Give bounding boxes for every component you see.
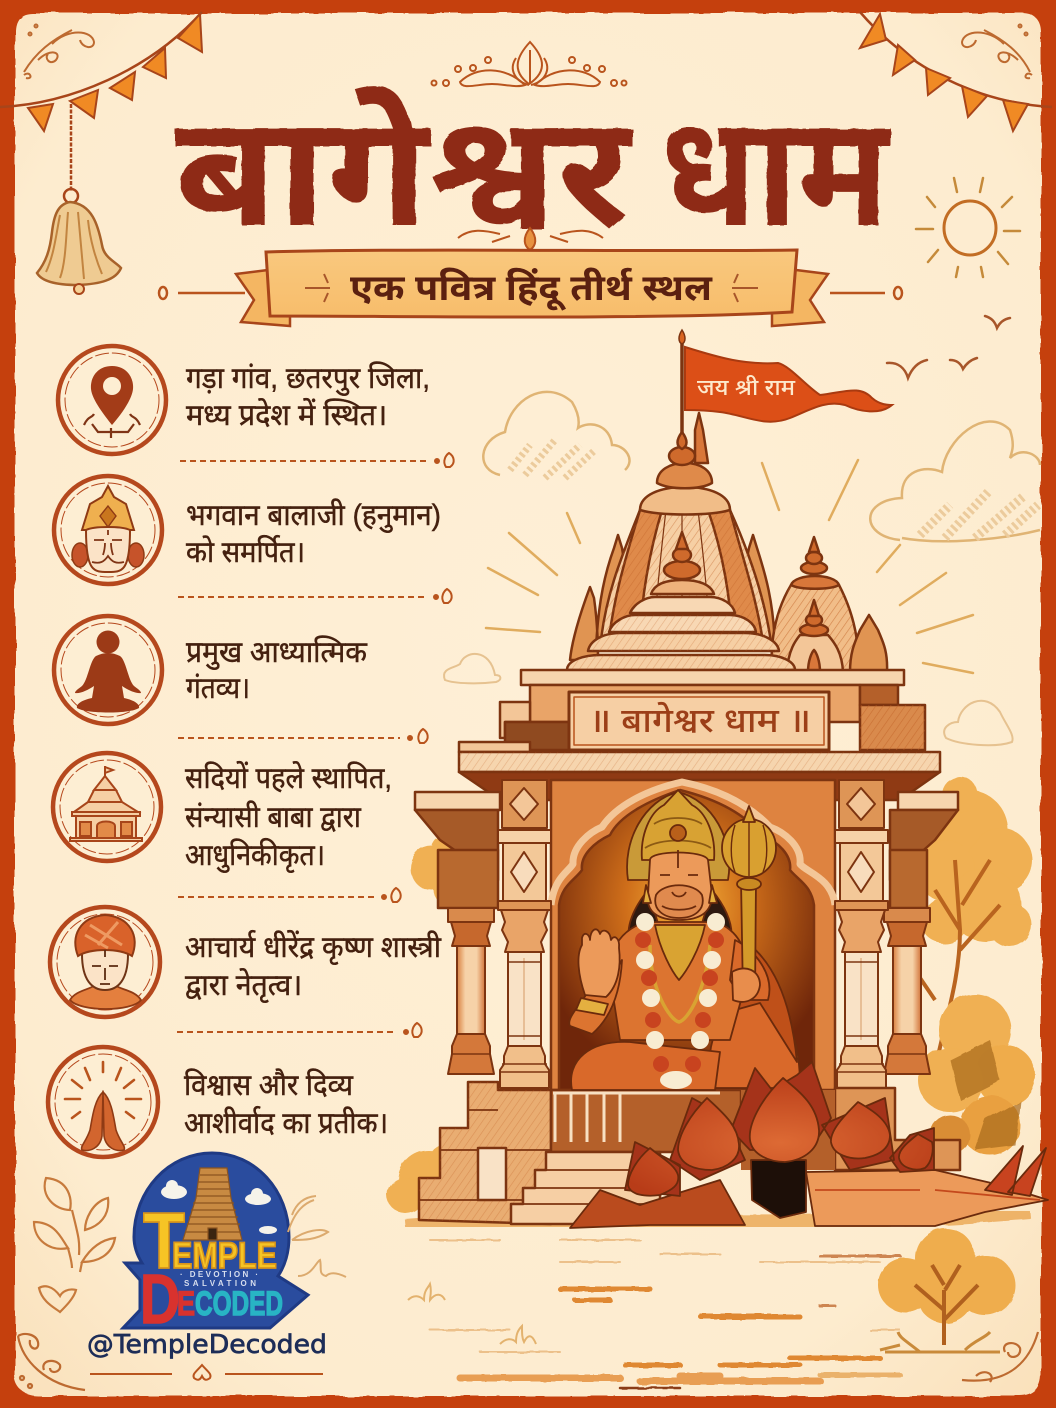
right side ornament: [830, 287, 902, 299]
icon: sun: [916, 178, 1020, 277]
corner scroll bottom left: [18, 1334, 85, 1390]
tree upper right: [915, 777, 1032, 1070]
item 1 text: मध्य प्रदेश में स्थित।: [186, 397, 387, 432]
face: [648, 852, 712, 920]
title: बागेश्वर: [175, 85, 633, 258]
ribbon ornaments: [305, 274, 758, 302]
ribbon left tail: [236, 270, 290, 326]
main dome bands: [640, 487, 730, 514]
left side ornament: [159, 287, 245, 299]
item 4 text: [185, 760, 392, 874]
leaves lower left: [34, 1178, 115, 1312]
bunting left: [0, 12, 202, 131]
title underline ornament: [458, 228, 603, 250]
main shikhara: [600, 510, 772, 650]
lotus buds: [628, 1078, 933, 1196]
item 4 icon: temple: [53, 753, 161, 861]
top ornament: [432, 42, 626, 86]
logo clouds: [161, 1180, 277, 1234]
gripping hand: [732, 968, 760, 1002]
divider 5: [177, 1023, 422, 1037]
item 6 text: [184, 1068, 388, 1140]
main finial: [669, 432, 695, 465]
radiating rays: [486, 460, 973, 673]
item 1 text: गड़ा गांव, छतरपुर जिला,: [186, 361, 430, 396]
upper block: [530, 685, 860, 722]
plaque text: ॥ बागेश्वर धाम ॥: [589, 702, 811, 740]
bush right: [918, 994, 1035, 1155]
garland: [635, 913, 725, 1089]
item 3 text: गंतव्य।: [186, 672, 250, 705]
logo word temple: EMPLE: [172, 1235, 277, 1276]
logo badge: [123, 1153, 308, 1328]
name plaque: [569, 692, 829, 750]
item 3 icon: meditation: [54, 616, 162, 724]
temple: [415, 413, 960, 1224]
item 4 text: सदियों पहले स्थापित,: [185, 760, 392, 795]
front dome tiers: [567, 580, 795, 670]
item 5 text: द्वारा नेतृत्व।: [185, 967, 302, 1004]
crown: [642, 790, 714, 860]
divider 2: [178, 589, 452, 603]
small spire right: [850, 615, 887, 672]
cloud upper right: [870, 421, 1040, 541]
logo tagline: SALVATION: [184, 1279, 256, 1288]
item 2 text: भगवान बालाजी (हनुमान): [186, 498, 441, 533]
gopuram tower: [183, 1168, 242, 1240]
bangle: [576, 998, 608, 1015]
base right: [835, 1088, 960, 1170]
divider 1: [180, 453, 454, 467]
birds: [887, 316, 1010, 378]
outer pillars: [448, 908, 494, 1074]
item 6 icon: namaste: [48, 1047, 158, 1157]
icon: bell: [37, 104, 121, 294]
raised arm: [569, 960, 622, 1034]
niche: [559, 790, 814, 1090]
torso: [609, 922, 748, 1040]
title: धाम: [660, 85, 892, 258]
logo word decoded: [140, 1260, 283, 1338]
Hanuman: [569, 790, 800, 1090]
broken slab: [806, 1170, 1048, 1226]
flag text: जय श्री राम: [697, 375, 796, 400]
banner ribbon: [236, 250, 828, 326]
railing: [553, 1093, 720, 1142]
outer ledges: [415, 792, 958, 810]
logo word temple: [143, 1196, 277, 1285]
tree lower right: [878, 1228, 1015, 1352]
logo word temple: T: [143, 1196, 185, 1285]
item 5 icon: acharya: [50, 907, 160, 1017]
item 4 text: संन्यासी बाबा द्वारा: [185, 800, 362, 834]
arch outline: [551, 782, 835, 905]
side tiers: [500, 702, 530, 738]
grass tufts: [408, 1284, 536, 1344]
left base: [570, 1180, 745, 1228]
upper outer blocks: [438, 850, 498, 908]
divider 3: [178, 729, 428, 743]
bunting right: [860, 12, 1052, 131]
crossed leg: [571, 1042, 720, 1090]
logo tagline: · DEVOTION ·: [180, 1270, 258, 1279]
face details: [660, 850, 698, 910]
item 6 text: विश्वास और दिव्य: [184, 1068, 354, 1102]
item 3 text: प्रमुख आध्यात्मिक: [186, 635, 368, 670]
item 6 text: आशीर्वाद का प्रतीक।: [184, 1106, 388, 1140]
logo: [123, 1153, 308, 1338]
item 5 text: [185, 930, 442, 1004]
necklace: [655, 925, 705, 980]
lotus and broken slab: [570, 1062, 1048, 1228]
flag: [679, 330, 892, 436]
right dome: [772, 585, 858, 672]
inner pillars: [498, 780, 551, 1088]
eave: [459, 772, 940, 800]
leaves right of logo: [288, 1196, 346, 1277]
title: [175, 85, 892, 258]
dark opening: [751, 1160, 806, 1218]
right spikes: [985, 1146, 1046, 1196]
logo word decoded: E: [177, 1285, 195, 1323]
main cornice: [459, 752, 940, 772]
left stairs: [419, 1082, 551, 1224]
ground: [405, 1212, 1030, 1388]
item 2 text: को समर्पित।: [186, 535, 305, 569]
corner scroll top left: [24, 24, 94, 78]
bottom ornament: [90, 1365, 323, 1380]
cloud upper left: [483, 392, 630, 478]
muzzle: [655, 885, 703, 918]
corner scroll top right: [962, 24, 1032, 78]
raised hand: [578, 929, 620, 997]
item 1 icon: location: [58, 346, 166, 454]
central steps: [511, 1152, 660, 1224]
divider 4: [178, 888, 401, 902]
item 5 text: आचार्य धीरेंद्र कृष्ण शास्त्री: [185, 930, 442, 966]
upper slab: [521, 670, 904, 685]
rear spire pole: [695, 413, 708, 463]
side spires: [570, 535, 775, 660]
subtitle: एक पवित्र हिंदू तीर्थ स्थल: [350, 267, 714, 311]
cloak: [735, 945, 797, 1062]
arch wall: [551, 780, 835, 1090]
logo word decoded: D: [140, 1260, 180, 1338]
foliage left of temple: [387, 836, 466, 1213]
earrings: [643, 885, 717, 903]
item 2 text: [186, 498, 441, 569]
right small dome: [787, 635, 843, 672]
logo tagline: [180, 1270, 258, 1288]
item 1 text: [186, 361, 430, 432]
corner scroll bottom right: [962, 1332, 1038, 1382]
back petals: [625, 1062, 934, 1196]
shrine base: [551, 1090, 741, 1152]
mace: [722, 806, 776, 996]
handle: @TempleDecoded: [87, 1330, 327, 1360]
ribbon right tail: [772, 270, 828, 326]
item 3 text: [186, 635, 368, 705]
ribbon body: [266, 250, 797, 317]
holding arm: [730, 940, 769, 1000]
right knee and cloth: [709, 1000, 800, 1088]
logo word decoded: CODED: [195, 1285, 283, 1323]
item 4 text: आधुनिकीकृत।: [185, 838, 325, 874]
small clouds: [444, 654, 1013, 745]
item 2 icon: Hanuman face: [54, 476, 162, 584]
halo and hair: [627, 792, 729, 880]
pedestal block: [478, 1148, 506, 1200]
